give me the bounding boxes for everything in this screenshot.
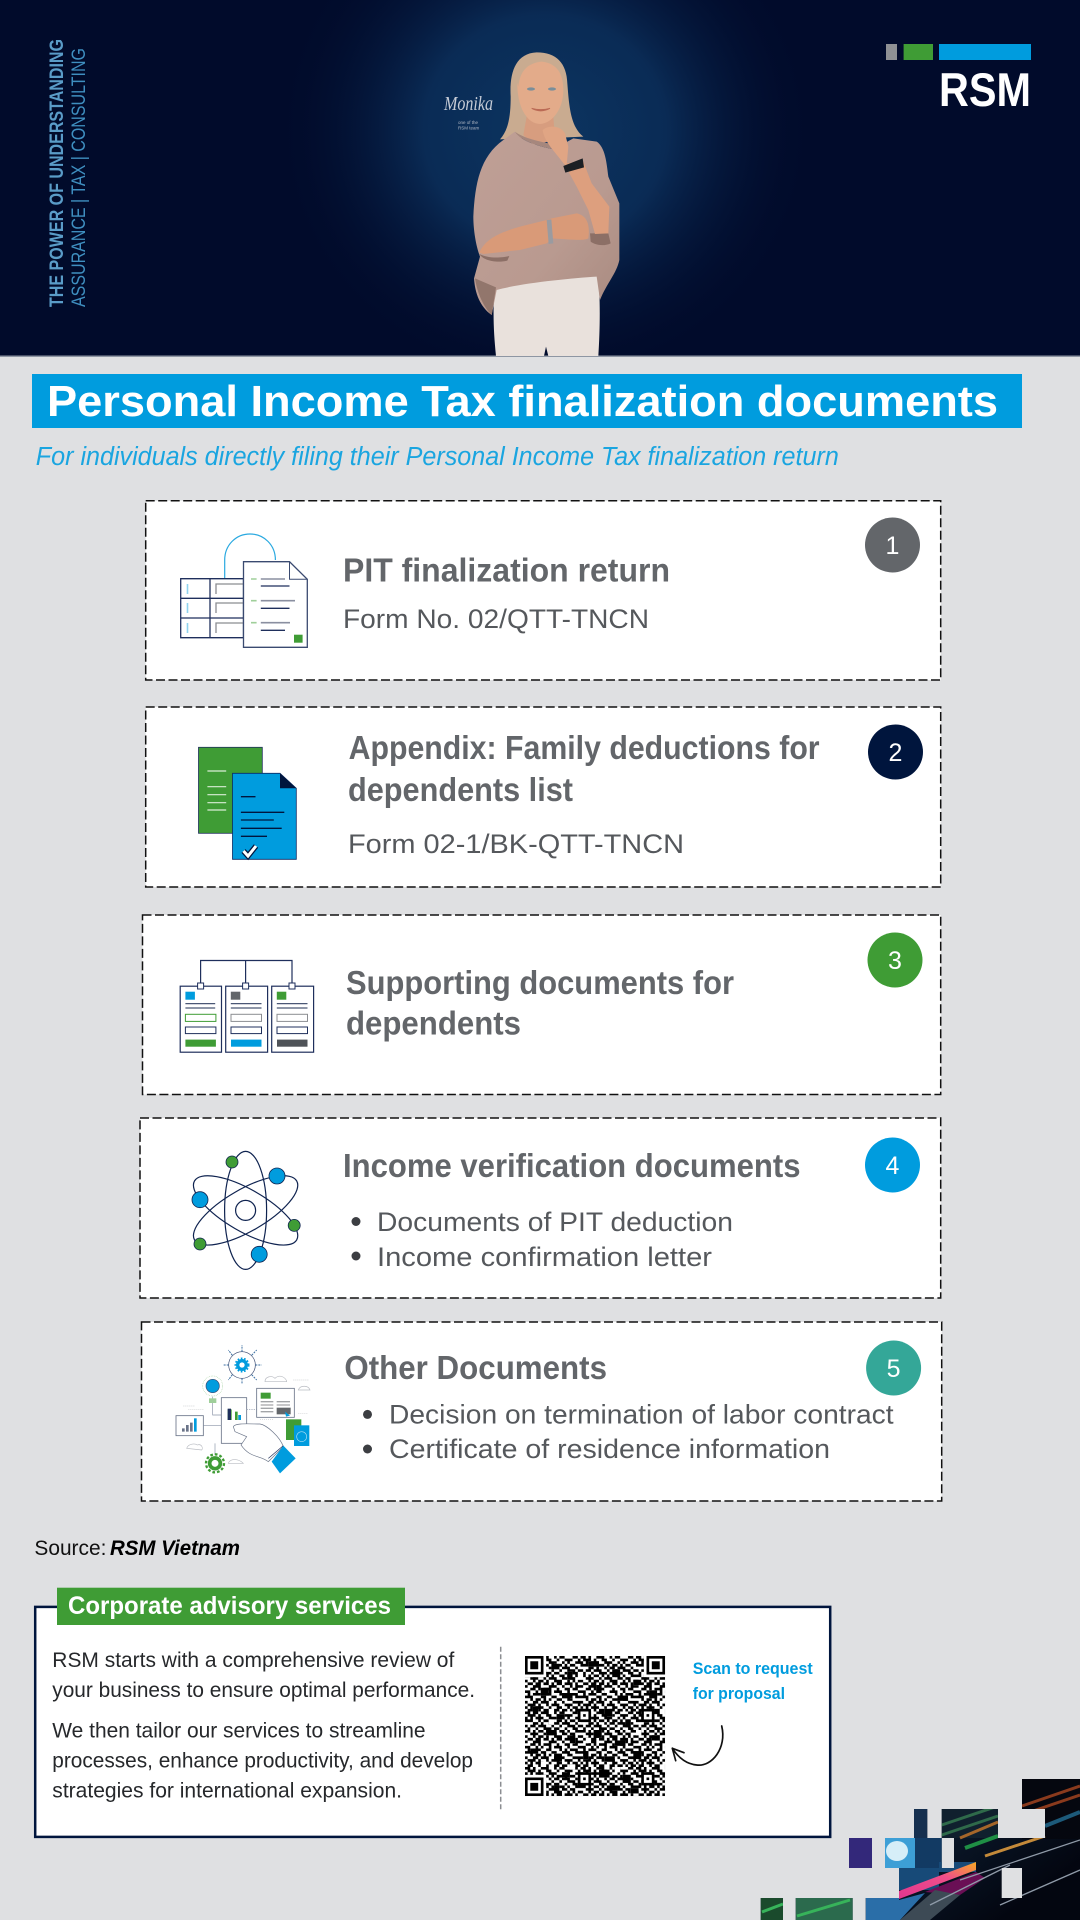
QR code [525, 1656, 665, 1796]
panel: card 5 Other Documents [142, 1322, 942, 1501]
badge 2: 2 [889, 739, 902, 767]
scan caption: Scan to request [693, 1659, 813, 1678]
body text: We then tailor our services to streamline [52, 1720, 426, 1743]
panel: corporate advisory services [35, 1588, 830, 1837]
logo: RSM [886, 44, 1031, 116]
decorative corner image [755, 1775, 1080, 1920]
panel: card 3 Supporting documents [142, 915, 941, 1094]
icon: atom [184, 1151, 307, 1269]
badge 4 [865, 1138, 920, 1192]
logo: RSM: RSM [939, 63, 1031, 116]
source line: RSM Vietnam [110, 1537, 240, 1560]
brand tagline vertical text [47, 39, 90, 307]
form number: Form 02-1/BK-QTT-TNCN [348, 829, 684, 859]
badge 2 [868, 724, 923, 780]
heading: Income verification documents [343, 1147, 800, 1184]
badge 4: 4 [886, 1152, 900, 1180]
arrow to QR [672, 1726, 723, 1765]
signature caption: one of the [458, 120, 479, 125]
bullet list: Decision on termination of labor contract [389, 1400, 894, 1430]
heading [348, 729, 820, 808]
heading [346, 964, 734, 1041]
body text: strategies for international expansion. [52, 1780, 402, 1803]
body text [52, 1649, 475, 1803]
bullet list: Income confirmation letter [377, 1242, 712, 1272]
panel: header banner [0, 0, 1080, 357]
badge 5: 5 [887, 1355, 901, 1383]
body text: RSM starts with a comprehensive review of [52, 1649, 454, 1672]
source line [34, 1537, 240, 1560]
heading: PIT finalization return [343, 552, 670, 588]
scan caption [693, 1659, 813, 1703]
bullet list: Documents of PIT deduction [377, 1207, 733, 1237]
heading: Appendix: Family deductions for [349, 729, 820, 766]
icon: three linked forms [180, 960, 314, 1052]
panel: card 2 Appendix [146, 707, 941, 887]
badge 1: 1 [886, 532, 899, 560]
badge 3: 3 [888, 947, 902, 975]
bullet list: Certificate of residence information [389, 1434, 830, 1464]
body text: processes, enhance productivity, and develop [52, 1750, 473, 1773]
icon: green and blue documents [198, 747, 296, 859]
brand tagline vertical text: ASSURANCE | TAX | CONSULTING [69, 48, 90, 307]
signature caption: RSM team [458, 126, 480, 130]
bullet list [363, 1400, 894, 1464]
heading: dependents list [348, 771, 573, 808]
signature caption [443, 93, 493, 130]
panel: card 4 Income verification [140, 1118, 941, 1298]
green heading tab: Corporate advisory services [68, 1592, 391, 1620]
badge 3 [868, 932, 922, 988]
badge 1 [865, 518, 920, 572]
panel: card 1 PIT finalization return [146, 501, 941, 680]
signature caption: Monika [443, 93, 493, 115]
heading: dependents [346, 1004, 521, 1041]
badge 5 [866, 1340, 921, 1396]
body text: your business to ensure optimal performance. [52, 1679, 475, 1702]
scan caption: for proposal [693, 1684, 785, 1703]
icon: table and document [181, 534, 307, 647]
source line: Source: [34, 1537, 106, 1560]
icon: digital tablet and hand [176, 1345, 310, 1473]
heading: Supporting documents for [346, 964, 734, 1001]
title bar: Personal Income Tax finalization documents [47, 377, 998, 426]
bullet list [352, 1207, 733, 1272]
photo: woman portrait illustration [473, 52, 619, 356]
subtitle: For individuals directly filing their Personal Income Tax finalization return [36, 443, 839, 471]
form number: Form No. 02/QTT-TNCN [343, 604, 649, 634]
heading: Other Documents [344, 1349, 607, 1386]
